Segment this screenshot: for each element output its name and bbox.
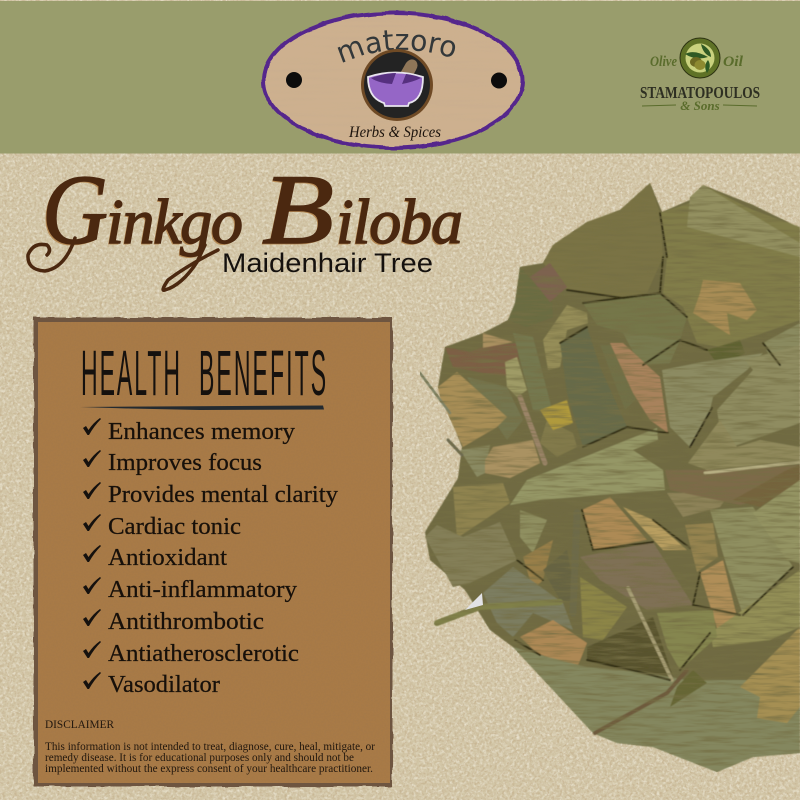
disclaimer text: remedy disease. It is for educational purposes only and should not be (45, 752, 354, 764)
benefit: provides mental clarity: Provides mental clarity (108, 482, 338, 508)
title: Ginkgo Biloba: G (40, 156, 106, 266)
disclaimer text (45, 741, 375, 775)
disclaimer text: implemented without the express consent of your healthcare practitioner. (45, 763, 373, 775)
benefits list (83, 418, 338, 698)
text Oil: Oil (723, 54, 744, 70)
white gap in leaves (465, 593, 483, 610)
subtitle: Maidenhair Tree: Maidenhair Tree (222, 248, 433, 278)
title: Ginkgo Biloba: iloba (336, 186, 463, 257)
logo name matzoro: matzoro (338, 30, 456, 62)
logo tagline: Herbs & Spices (348, 124, 441, 141)
title: Ginkgo Biloba: inkgo (104, 188, 242, 258)
title: Ginkgo Biloba: inkgo (106, 186, 243, 257)
benefit: anti-inflammatory: Anti-inflammatory (108, 577, 297, 603)
header band (0, 1, 800, 154)
heading: health benefits: BENEFITS (199, 338, 326, 410)
logo purple rim (264, 13, 522, 148)
olive emblem (680, 38, 720, 78)
benefit: antithrombotic: Antithrombotic (108, 609, 264, 635)
text Olive: Olive (650, 54, 677, 70)
benefit: vasodilator: Vasodilator (108, 672, 220, 698)
benefit: antioxidant: Antioxidant (108, 545, 227, 571)
logo mortar and pestle emblem (361, 49, 433, 121)
heading: health benefits: HEALTH (81, 338, 180, 410)
text and Sons: & Sons (680, 98, 720, 113)
panel frame (34, 318, 392, 786)
benefit: enhances memory: Enhances memory (108, 419, 295, 445)
title: Ginkgo Biloba: B (262, 154, 334, 265)
heading underline brush stroke (80, 406, 324, 410)
title block (28, 154, 463, 290)
benefit: antiatherosclerotic: Antiatherosclerotic (108, 641, 299, 667)
logo: matzoro herbs and spices (261, 10, 525, 150)
disclaimer text: This information is not intended to treat, diagnose, cure, heal, mitigate, or (45, 741, 375, 753)
disclaimer heading: DISCLAIMER (45, 719, 114, 731)
title: Ginkgo Biloba: B (260, 156, 332, 266)
heading: health benefits (81, 338, 326, 410)
logo: Stamatopoulos olive oil (640, 38, 760, 113)
title: Ginkgo Biloba: iloba (334, 188, 462, 258)
benefit: cardiac tonic: Cardiac tonic (108, 514, 241, 540)
photo: pile of dried ginkgo leaves (420, 183, 800, 772)
panel fill (38, 322, 390, 783)
benefit: improves focus: Improves focus (108, 450, 262, 476)
logo wooden oval (264, 14, 522, 148)
leaf pile base (425, 183, 800, 772)
text Stamatopoulos: STAMATOPOULOS (640, 83, 760, 102)
logo mounting holes (286, 72, 507, 88)
panel: health benefits (34, 318, 392, 786)
title: Ginkgo Biloba: G (42, 154, 108, 265)
title: Ginkgo Biloba (28, 154, 463, 290)
